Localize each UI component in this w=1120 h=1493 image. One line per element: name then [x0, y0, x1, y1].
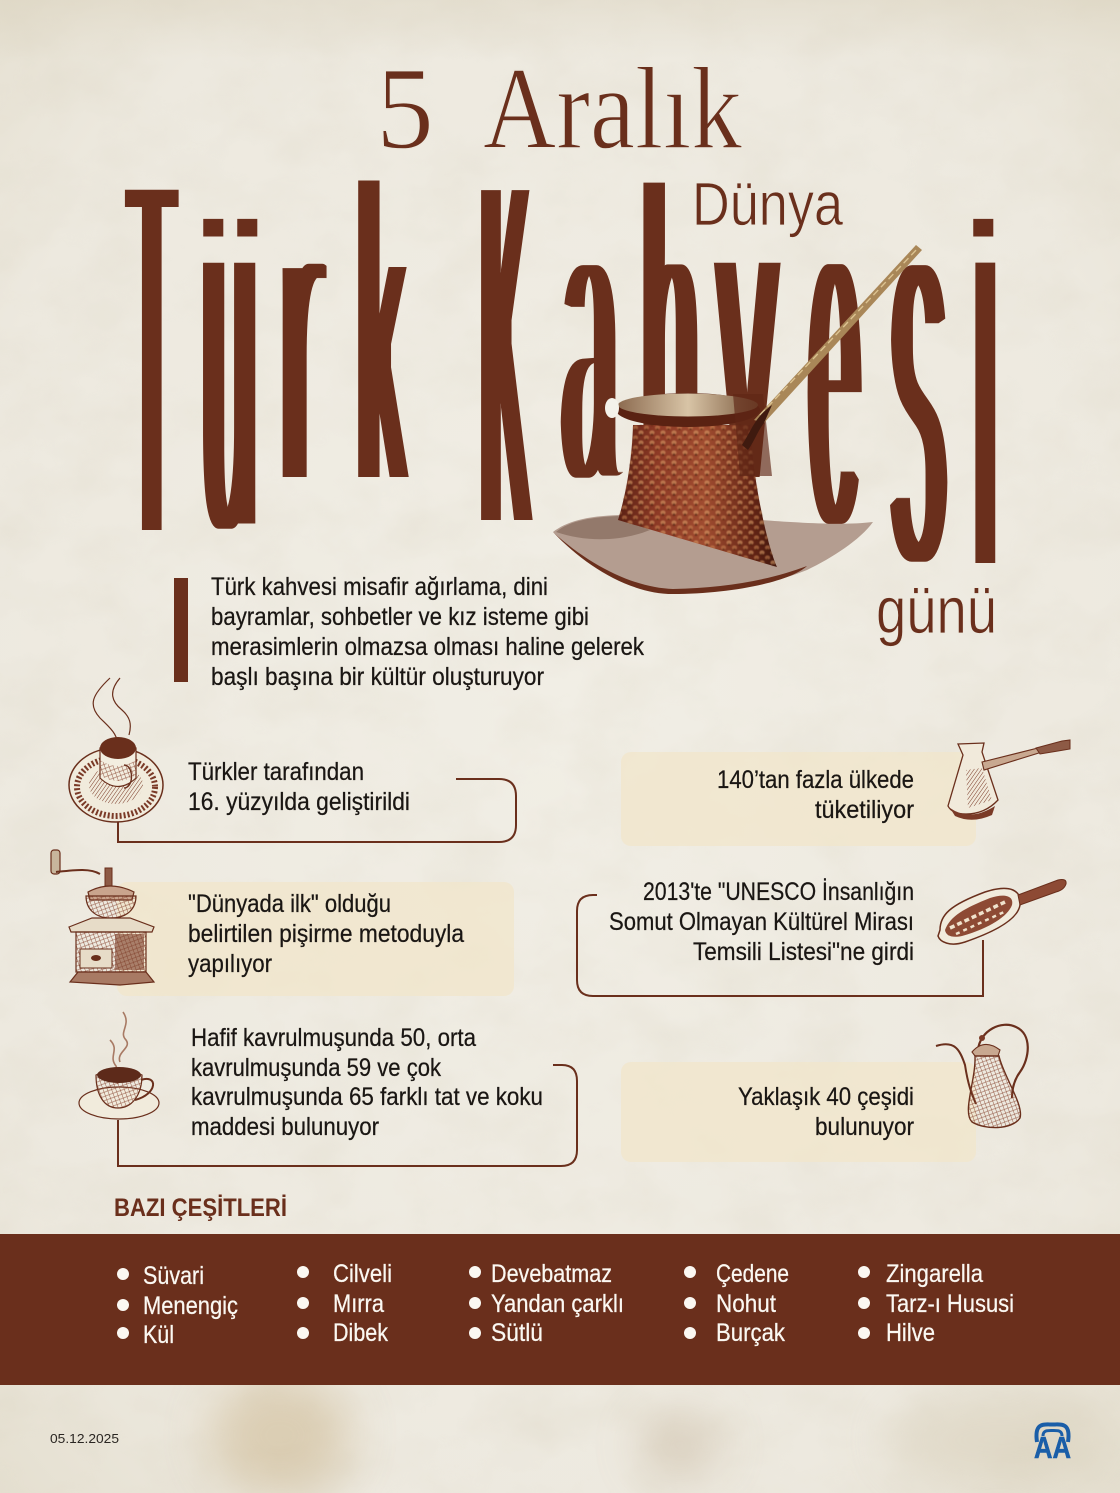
sand mound: [553, 515, 873, 593]
column 4: Çedene: [716, 1260, 789, 1288]
connector: UNESCO: [577, 895, 983, 996]
fact: countries: tüketiliyor: [815, 796, 914, 824]
icon: long-spouted coffee pot: [936, 1025, 1028, 1128]
column 3: Yandan çarklı: [491, 1290, 624, 1318]
fact: UNESCO: [609, 877, 914, 966]
icon: roasting scoop with beans: [938, 880, 1066, 944]
fact: varieties count: bulunuyor: [815, 1113, 914, 1141]
column 3: Devebatmaz: [491, 1260, 612, 1288]
intro text: başlı başına bir kültür oluşturuyor: [211, 663, 544, 691]
fact: UNESCO: Temsili Listesi"ne girdi: [693, 938, 914, 966]
column 4: Nohut: [716, 1290, 776, 1318]
fact: roast flavours: kavrulmuşunda 65 farklı tat ve koku: [191, 1083, 543, 1111]
column 5: [858, 1260, 1014, 1347]
column 4: Burçak: [716, 1319, 785, 1347]
icon: cup on ornate saucer: [69, 678, 163, 822]
title: Türk Kahvesi, first letters: K: [482, 67, 530, 641]
title: Türk Kahvesi, first letters: T: [130, 64, 174, 654]
title: Türk Kahvesi, first letters: h: [643, 94, 697, 582]
panel: varieties fact background: [621, 1062, 976, 1162]
pot body: [618, 425, 777, 567]
column 3: Sütlü: [491, 1319, 543, 1347]
title: günü: günü: [876, 573, 997, 647]
fact: UNESCO: Somut Olmayan Kültürel Mirası: [609, 908, 914, 936]
fact: varieties count: Yaklaşık 40 çeşidi: [738, 1083, 914, 1111]
column 2: Cilveli: [333, 1260, 392, 1288]
cezve wooden handle: [742, 245, 922, 450]
fact: countries: [717, 766, 914, 824]
title: date: [376, 43, 742, 174]
icon: steaming cup and saucer: [79, 1012, 159, 1119]
title: Türk Kahvesi, last letters: ı: [974, 22, 996, 705]
icon: coffee grinder: [51, 850, 154, 985]
fact: first brewing method: "Dünyada ilk" olduğu: [188, 890, 391, 918]
intro text: Türk kahvesi misafir ağırlama, dini: [211, 573, 548, 601]
column 1: Süvari: [143, 1262, 204, 1290]
fact: first brewing method: [188, 890, 464, 978]
fact: countries: 140’tan fazla ülkede: [717, 766, 914, 794]
dark rim: [553, 532, 807, 594]
hammered surface: [618, 425, 777, 567]
column 2: Dibek: [333, 1319, 388, 1347]
fact: roast flavours: maddesi bulunuyor: [191, 1113, 379, 1141]
title: Türk Kahvesi, first letters: k: [358, 89, 407, 583]
fact: 16th century: 16. yüzyılda geliştirildi: [188, 788, 410, 816]
title: Türk Kahvesi, last letters: [810, 0, 996, 705]
panel: grinder fact background: [117, 882, 514, 996]
title: Türk Kahvesi, last letters: s: [892, 40, 945, 693]
fact: roast flavours: [191, 1024, 543, 1141]
heading: varieties: BAZI ÇEŞİTLERİ: [114, 1194, 287, 1222]
intro accent bar: [174, 578, 188, 682]
intro text: merasimlerin olmazsa olması haline gelerek: [211, 633, 644, 661]
fact: roast flavours: kavrulmuşunda 59 ve çok: [191, 1054, 441, 1082]
title: date: Aralık: [483, 43, 742, 174]
connector: 16th century: [118, 779, 516, 842]
illustration: copper cezve on coffee sand: [553, 393, 873, 594]
title: Türk Kahvesi, first letters: a: [563, 97, 617, 577]
column 5: Zingarella: [886, 1260, 983, 1288]
logo: AA: AA: [1034, 1430, 1071, 1465]
fact: 16th century: [188, 758, 410, 816]
sand texture: [556, 516, 650, 539]
column 1: [117, 1262, 238, 1349]
panel: countries fact background: [621, 752, 976, 846]
title: Türk Kahvesi, first letters: r: [280, 93, 322, 582]
column 5: Hilve: [886, 1319, 935, 1347]
inside of pot: [618, 394, 758, 416]
connector: roast: [118, 1065, 577, 1166]
title: Türk Kahvesi, last letters: e: [810, 65, 859, 640]
column 5: Tarz-ı Hususi: [886, 1290, 1014, 1318]
title: date: 5: [376, 43, 434, 174]
title: Dünya: Dünya: [692, 170, 843, 238]
title: Türk Kahvesi, first letters: u: [204, 49, 255, 649]
column 1: Menengiç: [143, 1292, 238, 1320]
intro text: [211, 573, 644, 691]
column 2: [297, 1260, 392, 1347]
title: Türk Kahvesi, first letters: v: [718, 82, 777, 584]
fact: 16th century: Türkler tarafından: [188, 758, 364, 786]
fact: UNESCO: 2013'te "UNESCO İnsanlığın: [643, 877, 914, 906]
date: 05.12.2025: [50, 1431, 119, 1446]
column 2: Mırra: [333, 1290, 384, 1318]
translucent v overlay: [733, 394, 772, 476]
column 3: [469, 1260, 624, 1347]
fact: first brewing method: belirtilen pişirme metoduyla: [188, 920, 464, 948]
icon: cezve sketch: [948, 740, 1070, 820]
fact: varieties count: [738, 1083, 914, 1141]
fact: roast flavours: Hafif kavrulmuşunda 50, orta: [191, 1024, 476, 1052]
band: varieties list: [0, 1234, 1120, 1385]
rim: [616, 393, 760, 427]
white halo: [605, 398, 619, 418]
column 1: Kül: [143, 1321, 174, 1349]
intro text: bayramlar, sohbetler ve kız isteme gibi: [211, 603, 589, 631]
column 4: [684, 1260, 789, 1347]
title: Türk Kahvesi, first letters: [130, 0, 777, 654]
fact: first brewing method: yapılıyor: [188, 950, 272, 978]
